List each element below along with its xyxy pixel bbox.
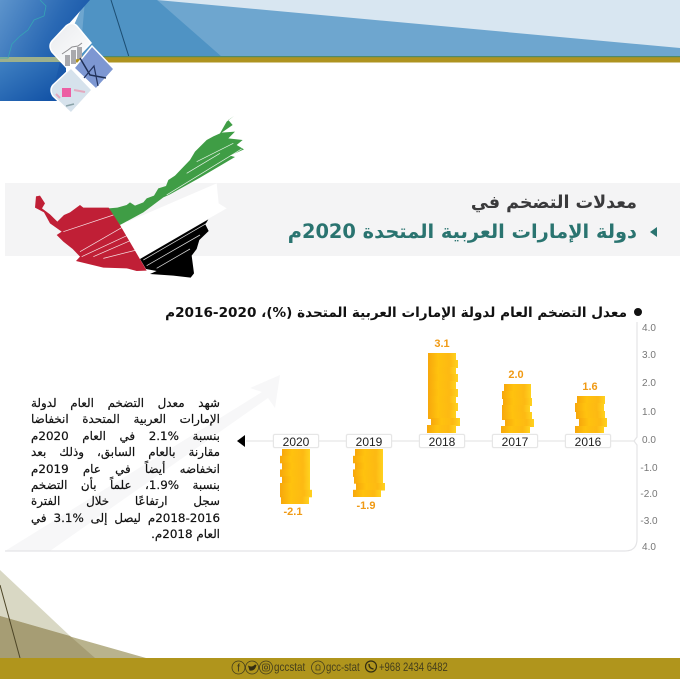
handle gccstat: gccstat: [274, 660, 305, 674]
value labels: 2.0: [508, 369, 524, 381]
description text: بنسبة %2.1 في العام 2020م: [31, 429, 220, 443]
y axis labels: 4.0: [642, 542, 656, 553]
description text: العام 2018م.: [151, 527, 220, 541]
bar 2018: [427, 353, 460, 433]
y axis labels: -3.0: [640, 516, 658, 527]
bar 2020: [280, 449, 312, 504]
icons: [232, 660, 378, 674]
bar 2017: [501, 384, 534, 433]
description text: شهد معدل التضخم العام لدولة: [31, 396, 220, 410]
value labels: 3.1: [434, 338, 450, 350]
y axis labels: [640, 323, 658, 553]
footer band: [0, 658, 680, 679]
tile: chart icon: [50, 24, 91, 68]
y axis labels: 2.0: [642, 378, 656, 389]
year labels: 2019: [356, 435, 382, 449]
value labels: -1.9: [357, 500, 375, 512]
y axis labels: -1.0: [640, 463, 658, 474]
description text: انخفاضه أيضاً في عام 2019م: [31, 462, 220, 476]
title band: [5, 183, 680, 256]
header banner: [0, 0, 680, 112]
value labels: 1.6: [582, 381, 598, 393]
description text: الإمارات العربية المتحدة انخفاضا: [31, 412, 220, 426]
description text: مقارنة بالعام السابق، وذلك بعد: [31, 445, 220, 459]
map of UAE in flag colours: [35, 116, 244, 278]
chart title: معدل التضخم العام لدولة الإمارات العربية المتحدة (%)، 2020-2016م: [165, 305, 627, 321]
description text: [31, 396, 220, 542]
description text: 2018-2016م ليصل إلى %3.1 في: [31, 511, 220, 525]
heading: [288, 193, 637, 243]
year labels: 2017: [502, 435, 528, 449]
footer social contacts: [232, 660, 448, 674]
chart title bullet: [634, 308, 642, 316]
value labels: -2.1: [284, 506, 302, 518]
y axis labels: 3.0: [642, 350, 656, 361]
description text: سجل ارتفاعًا خلال الفترة: [31, 494, 220, 508]
y axis labels: 4.0: [642, 323, 656, 334]
y axis labels: 0.0: [642, 435, 656, 446]
year labels: 2018: [429, 435, 455, 449]
tile: pink document: [51, 68, 92, 113]
year labels: [272, 434, 612, 449]
bar 2019: [353, 449, 385, 497]
y axis labels: 1.0: [642, 407, 656, 418]
tile: blue photo: [74, 46, 114, 89]
y axis labels: -2.0: [640, 489, 658, 500]
heading line 2: دولة الإمارات العربية المتحدة 2020م: [288, 220, 637, 243]
handle gcc-stat: gcc-stat: [326, 660, 360, 674]
bar 2016: [575, 396, 607, 433]
year labels: 2020: [283, 435, 309, 449]
year labels: 2016: [575, 435, 601, 449]
icons: f: [237, 662, 241, 674]
phone number: +968 2434 6482: [379, 660, 448, 674]
arrow at end of axis: [237, 435, 245, 447]
heading arrow: [650, 227, 657, 237]
heading line 1: معدلات التضخم في: [471, 193, 637, 213]
value labels: [284, 338, 598, 518]
description text: بنسبة %1.9، علماً بأن التضخم: [31, 478, 220, 492]
